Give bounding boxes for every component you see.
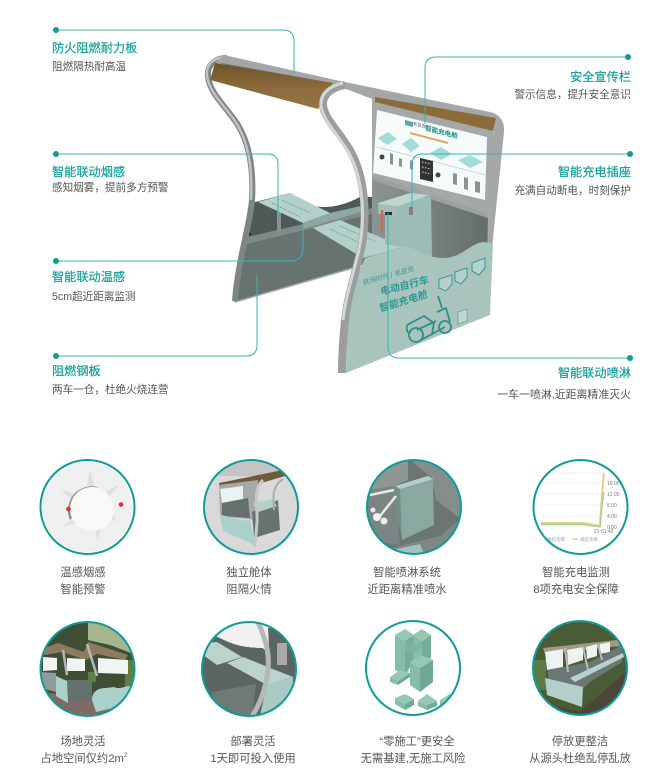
caption: 场地灵活 xyxy=(60,734,106,748)
feature circle: charging chart: 视在功率 xyxy=(547,536,565,543)
label: steel plate: 阻燃钢板 xyxy=(52,363,101,378)
feature circle: zero construction blocks xyxy=(366,621,460,715)
label: temperature sensor: 智能联动温感 xyxy=(52,269,125,284)
label: smoke sensor: 感知烟雾，提前多方预警 xyxy=(52,181,169,194)
small label plate xyxy=(458,309,467,324)
feature circle: independent cabin xyxy=(204,460,298,554)
feature circle: tidy parking photo xyxy=(532,620,628,716)
caption: 2 xyxy=(124,752,128,759)
label: charging socket xyxy=(514,164,631,197)
shelf 1 xyxy=(258,193,330,223)
shelf 2 xyxy=(313,220,403,258)
signage screen: 毛豆充 xyxy=(413,120,426,131)
scooter icon xyxy=(407,296,451,342)
caption: 占地空间仅约2m xyxy=(40,753,124,765)
feature circle: sprinkler system xyxy=(366,460,462,560)
caption: 无需基建,无施工风险 xyxy=(361,751,466,765)
label: fire-resistant board: 防火阻燃耐力板 xyxy=(52,40,137,55)
feature circle: charging chart xyxy=(533,460,629,556)
caption: 智能预警 xyxy=(60,582,106,596)
top bar xyxy=(215,55,504,248)
panel text: 电动自行车 xyxy=(380,273,429,298)
label: charging socket: 充满自动断电，时刻保护 xyxy=(514,184,631,197)
label: sprinkler xyxy=(497,365,631,401)
label: temperature sensor xyxy=(52,269,136,303)
front panel xyxy=(346,242,493,373)
caption: 智能喷淋系统 xyxy=(373,565,441,579)
rear frame xyxy=(208,58,252,301)
feature circle: site photo xyxy=(40,622,136,720)
caption xyxy=(40,734,128,765)
label: steel plate xyxy=(52,363,169,396)
product illustration: charging shelter xyxy=(207,55,504,373)
label: steel plate: 两车一仓，杜绝火烧连营 xyxy=(52,383,169,396)
feature circle: charging chart: 视在功率 xyxy=(580,536,598,543)
caption: 从源头杜绝乱停乱放 xyxy=(529,751,631,765)
caption xyxy=(533,565,619,596)
sign frame xyxy=(372,95,494,248)
label: sprinkler: 一车一喷淋,近距离精准灭火 xyxy=(497,387,631,401)
caption: 1天即可投入使用 xyxy=(210,751,296,765)
caption: 智能充电监测 xyxy=(542,565,610,579)
caption xyxy=(60,565,106,596)
signage screen: 智能充电舱 xyxy=(425,123,458,141)
caption xyxy=(529,734,631,765)
compartment interior xyxy=(372,176,488,312)
caption: 停放更整洁 xyxy=(552,734,608,748)
feature circle: deployment closeup xyxy=(201,622,297,720)
caption xyxy=(367,565,447,596)
label: safety board: 安全宣传栏 xyxy=(570,69,631,84)
extinguisher box xyxy=(385,197,432,258)
label: safety board: 警示信息，提升安全意识 xyxy=(514,88,631,101)
caption xyxy=(226,565,272,596)
caption: 近距离精准喷水 xyxy=(367,582,447,596)
label: fire-resistant board: 阻燃隔热耐高温 xyxy=(52,60,127,73)
rear back panel xyxy=(234,193,372,302)
signage screen xyxy=(373,110,487,200)
feature circle: charging chart: 21:51:43 xyxy=(594,529,614,535)
label: sprinkler: 智能联动喷淋 xyxy=(558,365,631,380)
caption: 阻隔火情 xyxy=(226,583,272,596)
QR code xyxy=(420,158,433,182)
caption: 独立舱体 xyxy=(226,565,272,579)
feature circle: charging chart: 16.00 xyxy=(607,481,620,487)
feature circle: smoke detector xyxy=(40,460,136,556)
panel text: 玖玛时代 | 毛豆充 xyxy=(363,264,414,287)
callout lines xyxy=(53,27,633,361)
caption: 部署灵活 xyxy=(230,734,276,748)
front frame xyxy=(321,83,364,373)
feature circle: charging chart: 12.00 xyxy=(607,492,620,498)
shield icons xyxy=(439,258,485,291)
label: charging socket: 智能充电插座 xyxy=(558,164,631,179)
caption: “零施工”更安全 xyxy=(379,734,455,748)
panel text: 智能充电舱 xyxy=(379,287,428,315)
caption: 温感烟感 xyxy=(60,565,106,579)
panel text xyxy=(363,264,429,315)
caption xyxy=(361,734,466,765)
caption: 8项充电安全保障 xyxy=(533,582,619,596)
feature circle: charging chart: 4.00 xyxy=(607,514,617,520)
roof wood panel xyxy=(210,63,333,109)
label: safety board xyxy=(514,69,631,101)
label: smoke sensor xyxy=(52,164,169,194)
label: temperature sensor: 5cm超近距离监测 xyxy=(52,290,136,303)
label: fire-resistant board xyxy=(52,40,137,73)
feature circle: charging chart: 8.00 xyxy=(607,503,617,509)
label: smoke sensor: 智能联动烟感 xyxy=(52,164,125,179)
caption xyxy=(210,734,296,765)
feature circle: charging chart: 0.00 xyxy=(607,525,617,531)
